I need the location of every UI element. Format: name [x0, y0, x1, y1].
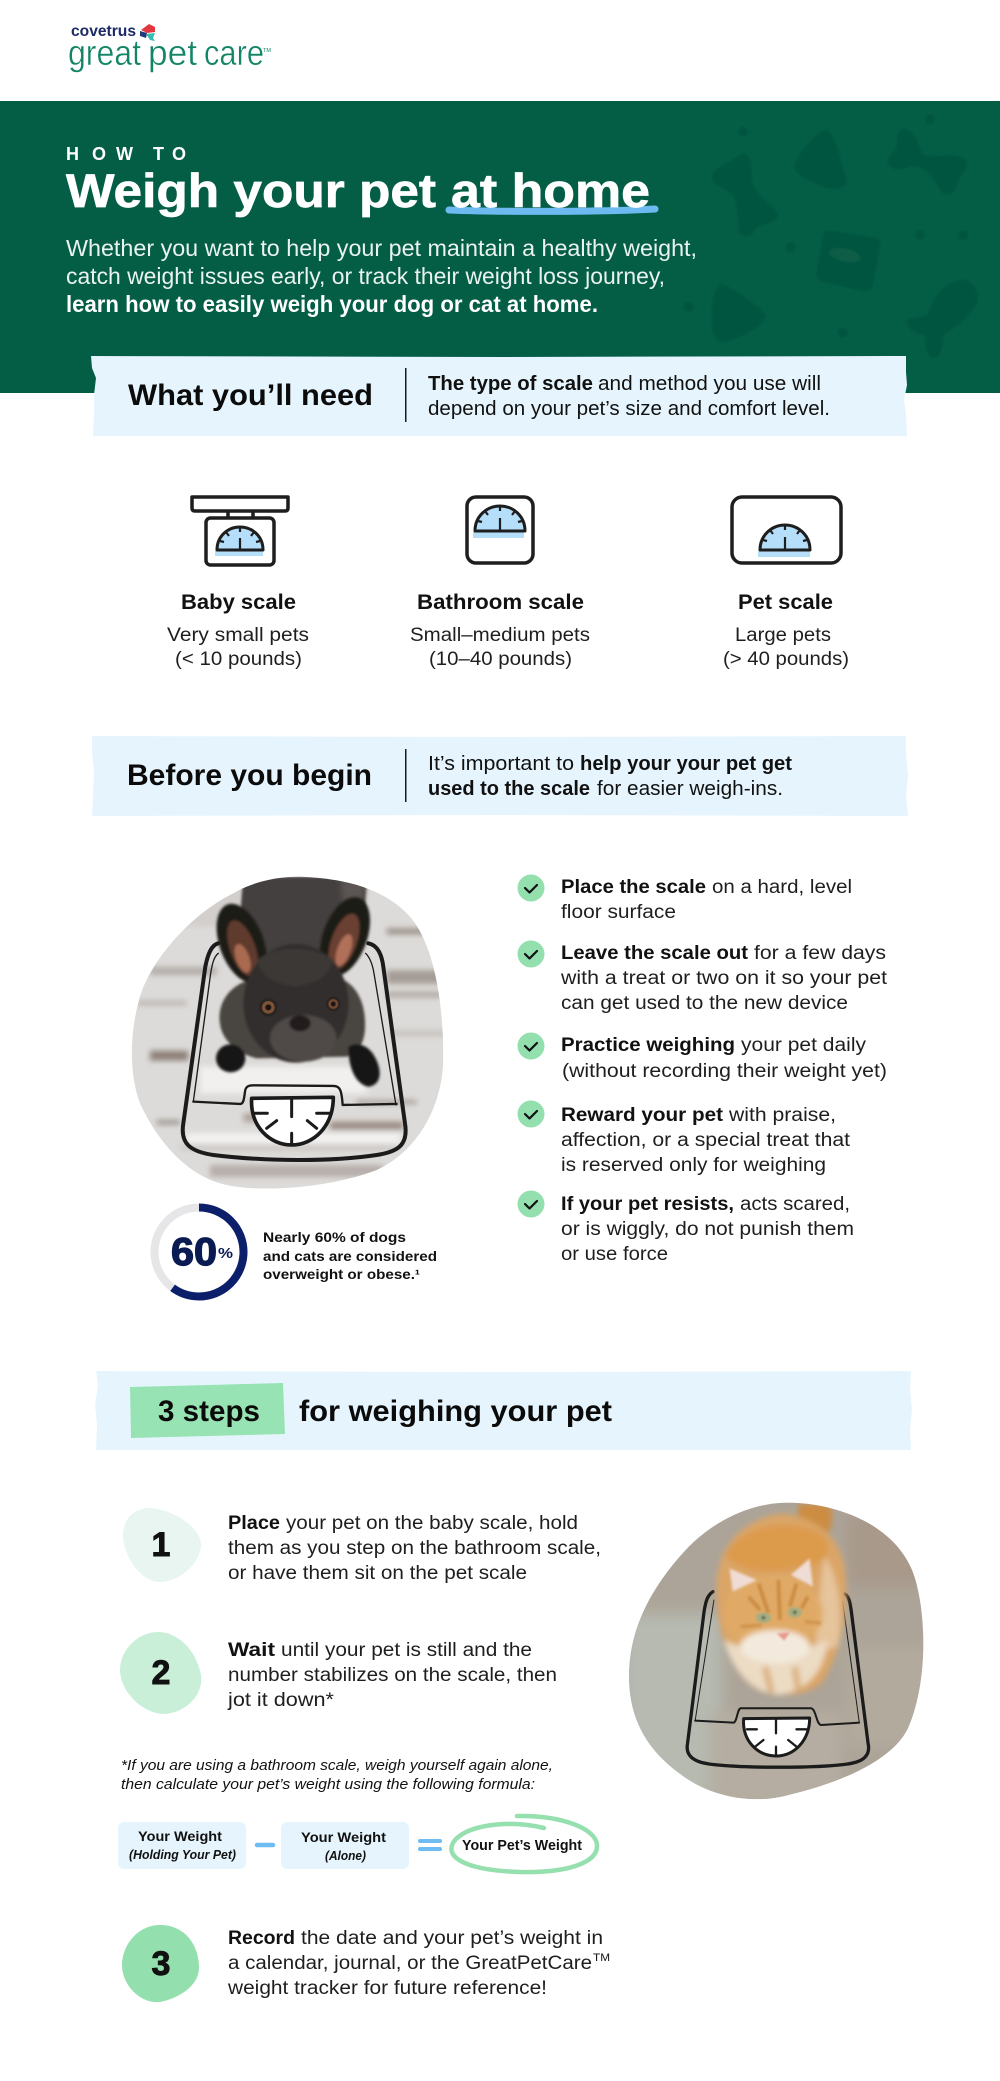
- item: leave the scale out: [518, 940, 888, 1014]
- item: leave the scale out: for a few days: [754, 943, 886, 964]
- item: place the scale: Place the scale: [561, 877, 706, 898]
- dog back: [240, 877, 367, 960]
- icon: bathroom scale: [467, 497, 533, 563]
- size range: [410, 625, 590, 670]
- item: if your pet resists: If your pet resists,: [561, 1194, 734, 1215]
- size range: [723, 625, 849, 670]
- stat caption: [263, 1229, 437, 1282]
- heading: Before you begin: [127, 759, 372, 792]
- panel: pet scale: [723, 497, 849, 670]
- item: leave the scale out: with a treat or two on it so your pet: [560, 968, 888, 989]
- trademark: TM: [263, 48, 271, 54]
- stat: 60 percent donut: [154, 1208, 437, 1296]
- scale display: [193, 1085, 397, 1145]
- size range: (10–40 pounds): [429, 649, 572, 670]
- step 2: 2: [152, 1654, 170, 1692]
- banner description: for easier weigh-ins.: [597, 778, 783, 800]
- title: at home: [451, 164, 650, 217]
- step text: or have them sit on the pet scale: [228, 1563, 527, 1584]
- step text: weight tracker for future reference!: [227, 1978, 547, 1999]
- logo: [68, 23, 271, 73]
- footnote: [121, 1757, 553, 1793]
- heading: 3 steps: [158, 1395, 260, 1428]
- step text: [228, 1513, 601, 1584]
- green tag: [130, 1383, 285, 1438]
- banner description: The type of scale: [428, 373, 593, 395]
- box: holding your pet: Your Weight: [138, 1828, 222, 1844]
- step text: jot it down*: [227, 1690, 335, 1711]
- footnote: then calculate your pet’s weight using the following formula:: [121, 1776, 535, 1793]
- banner description: and method you use will: [598, 373, 821, 395]
- checklist: [518, 874, 888, 1265]
- step text: a calendar, journal, or the GreatPetCare: [228, 1953, 592, 1974]
- cat eyes and nose: [756, 1607, 802, 1641]
- panel: before you begin banner: [92, 736, 908, 816]
- circled result: Your Pet’s Weight: [462, 1837, 582, 1854]
- step 3: 3: [152, 1945, 170, 1983]
- box: holding your pet: [118, 1822, 246, 1869]
- panel: what you'll need banner: [91, 356, 907, 436]
- intro paragraph: learn how to easily weigh your dog or cat at home.: [66, 291, 598, 317]
- title: [66, 164, 655, 217]
- stat caption: Nearly 60% of dogs: [263, 1229, 406, 1245]
- scale side rails: [183, 943, 406, 1160]
- eyebrow: how to: HOW TO: [66, 144, 186, 164]
- great pet care wordmark: [68, 32, 264, 73]
- item: leave the scale out: can get used to the new device: [561, 993, 848, 1014]
- panel: 3 steps banner: for weighing your pet: [299, 1395, 612, 1428]
- equals sign: [420, 1841, 440, 1849]
- number blob: [122, 1925, 199, 2002]
- great pet care wordmark: pet: [148, 32, 197, 73]
- icon: pet scale: [732, 497, 841, 563]
- dog body: [207, 890, 380, 1087]
- step 3: [122, 1925, 610, 2002]
- label: Pet scale: [738, 591, 833, 614]
- dog eyes: [259, 997, 341, 1017]
- box: alone: Your Weight: [301, 1829, 386, 1845]
- intro paragraph: Whether you want to help your pet maintain a healthy weight,: [66, 235, 697, 261]
- item: place the scale: floor surface: [561, 902, 676, 923]
- floor boards: [138, 887, 443, 1180]
- banner description: help your your pet get: [580, 753, 792, 775]
- item: reward your pet: is reserved only for weighing: [561, 1155, 826, 1176]
- size range: Large pets: [735, 625, 831, 646]
- item: practice weighing: Practice weighing: [561, 1035, 735, 1056]
- size range: Small–medium pets: [410, 625, 590, 646]
- minus sign: [257, 1843, 273, 1847]
- banner description: [428, 373, 830, 420]
- step text: the date and your pet’s weight in: [301, 1928, 603, 1949]
- item: if your pet resists: or is wiggly, do not punish them: [561, 1219, 854, 1240]
- photo: orange cat on scale: [623, 1497, 933, 1807]
- step text: TM: [593, 1952, 610, 1964]
- donut value: 60: [171, 1231, 217, 1274]
- item: practice weighing: (without recording their weight yet): [562, 1061, 887, 1082]
- panel: green header band: [0, 101, 1000, 393]
- item: if your pet resists: [518, 1190, 854, 1265]
- step 1: 1: [152, 1526, 170, 1564]
- item: practice weighing: [518, 1032, 887, 1082]
- item: reward your pet: affection, or a special treat that: [561, 1130, 851, 1151]
- panel: 3 steps banner: [95, 1371, 912, 1450]
- step text: number stabilizes on the scale, then: [228, 1665, 557, 1686]
- box: alone: [281, 1822, 409, 1869]
- step text: [227, 1928, 610, 1999]
- step text: Place: [228, 1513, 280, 1534]
- size range: (< 10 pounds): [175, 649, 302, 670]
- size range: Very small pets: [167, 625, 309, 646]
- step 2: [120, 1632, 557, 1714]
- great pet care wordmark: care: [204, 32, 264, 73]
- stat caption: and cats are considered: [263, 1248, 437, 1264]
- intro paragraph: catch weight issues early, or track their weight loss journey,: [66, 263, 665, 289]
- stat: 60 percent donut: %: [218, 1245, 233, 1262]
- item: place the scale: [518, 874, 852, 923]
- banner description: [428, 753, 792, 800]
- stat caption: overweight or obese.¹: [263, 1266, 420, 1282]
- banner description: depend on your pet’s size and comfort level.: [428, 398, 830, 420]
- scale display: [695, 1708, 859, 1756]
- great pet care wordmark: great: [68, 32, 141, 73]
- photo: french bulldog on scale: [120, 870, 453, 1203]
- number blob: [123, 1508, 201, 1582]
- item: place the scale: on a hard, level: [712, 877, 852, 898]
- size range: (> 40 pounds): [723, 649, 849, 670]
- step 1: [123, 1508, 601, 1584]
- icon: baby scale: [192, 497, 288, 565]
- intro paragraph: [66, 235, 697, 317]
- item: practice weighing: your pet daily: [741, 1035, 867, 1056]
- banner description: used to the scale: [428, 778, 590, 800]
- cat: [717, 1504, 846, 1695]
- box: holding your pet: (Holding Your Pet): [129, 1847, 236, 1862]
- panel: baby scale: [167, 497, 309, 670]
- item: if your pet resists: acts scared,: [740, 1194, 850, 1215]
- number blob: [120, 1632, 201, 1714]
- donut chart: [154, 1208, 244, 1296]
- step text: them as you step on the bathroom scale,: [228, 1538, 601, 1559]
- step text: until your pet is still and the: [281, 1640, 532, 1661]
- covetrus wordmark: covetrus: [71, 23, 136, 40]
- item: leave the scale out: Leave the scale out: [561, 943, 749, 964]
- formula: [118, 1816, 597, 1872]
- item: if your pet resists: or use force: [561, 1244, 668, 1265]
- item: reward your pet: [518, 1100, 851, 1176]
- banner description: It’s important to: [428, 753, 574, 775]
- label: Baby scale: [181, 591, 296, 614]
- step text: [227, 1640, 557, 1711]
- icon: covetrus mark: [140, 24, 155, 41]
- label: Bathroom scale: [417, 591, 584, 614]
- item: reward your pet: with praise,: [728, 1105, 836, 1126]
- concrete floor: [623, 1513, 933, 1807]
- size range: [167, 625, 309, 670]
- title: Weigh your pet: [66, 164, 436, 217]
- footnote: *If you are using a bathroom scale, weigh yourself again alone,: [121, 1757, 553, 1774]
- step text: Wait: [228, 1640, 276, 1661]
- item: reward your pet: Reward your pet: [561, 1105, 724, 1126]
- panel: bathroom scale: [410, 497, 590, 670]
- heading: What you’ll need: [128, 379, 373, 412]
- title underline stroke: [449, 209, 655, 211]
- decorative pet icons: [683, 114, 978, 358]
- circled result: [451, 1816, 597, 1872]
- step text: your pet on the baby scale, hold: [286, 1513, 578, 1534]
- scale rails: [687, 1592, 869, 1767]
- box: alone: (Alone): [325, 1848, 366, 1863]
- step text: Record: [228, 1928, 295, 1949]
